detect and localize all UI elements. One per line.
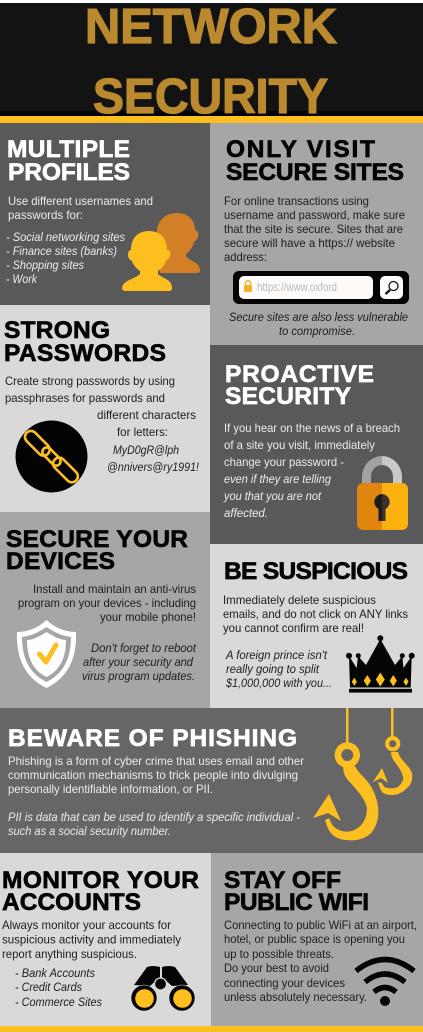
- text: devices body: your mobile phone!: [100, 610, 196, 624]
- text: phishing body: communication mechanisms to trick people into divulging: [8, 768, 298, 782]
- panel: be suspicious: [210, 544, 423, 709]
- note: PII definition: PII is data that can be used to identify a specific individual -: [8, 810, 300, 824]
- icon: browser address bar: [233, 271, 409, 304]
- text: secure sites body: that the site is secure. Sites that are: [224, 222, 403, 236]
- text: password examples: [107, 443, 200, 474]
- title: SECURITY: [93, 70, 328, 124]
- text: proactive caveat: affected.: [224, 506, 268, 520]
- heading: secure your devices: DEVICES: [6, 548, 115, 575]
- text: suspicious body: emails, and do not click on ANY links: [223, 607, 408, 621]
- list: site types: - Social networking sites: [6, 230, 125, 244]
- text: wifi body: hotel, or public space is opening you: [224, 932, 405, 946]
- heading: monitor your accounts: [2, 867, 199, 916]
- list: account types: - Commerce Sites: [15, 995, 102, 1009]
- text: suspicious body: you cannot confirm are real!: [223, 621, 364, 635]
- text: secure sites body: address:: [224, 250, 267, 264]
- panel: proactive security: [210, 345, 423, 544]
- note: reboot reminder: Don't forget to reboot: [91, 641, 197, 655]
- panel: only visit secure sites: [210, 123, 423, 345]
- text: wifi body: up to possible threats.: [224, 947, 334, 961]
- note: foreign prince: [225, 648, 332, 690]
- note: secure sites: Secure sites are also less vulnerable: [229, 310, 408, 324]
- text: passwords body: [5, 374, 196, 439]
- text: secure sites body: username and password, make sure: [224, 208, 405, 222]
- text: profiles intro: [8, 194, 153, 222]
- icon: fishing hooks: [313, 708, 412, 840]
- icon: browser address bar: https://www.oxford: [257, 280, 337, 294]
- text: devices body: [18, 582, 196, 624]
- text: devices body: program on your devices - including: [18, 596, 196, 610]
- text: proactive caveat: you that you are not: [223, 489, 322, 503]
- heading: only visit secure sites: [226, 136, 404, 186]
- panel: strong passwords: [0, 305, 210, 512]
- text: secure sites body: For online transactions using: [224, 194, 369, 208]
- text: wifi body: connecting your devices: [224, 976, 345, 990]
- text: profiles intro: passwords for:: [8, 208, 83, 222]
- heading: multiple profiles: [7, 136, 130, 186]
- icon: binoculars: [131, 966, 195, 1011]
- note: reboot reminder: virus program updates.: [82, 669, 195, 683]
- text: suspicious body: [223, 593, 408, 635]
- note: secure sites: [229, 310, 408, 338]
- icon: shield with check: [17, 620, 76, 688]
- list: site types: - Work: [6, 272, 38, 286]
- note: reboot reminder: after your security and: [83, 655, 193, 669]
- icon: crown: [346, 635, 415, 693]
- list: account types: - Bank Accounts: [15, 966, 95, 980]
- panel: multiple profiles: [0, 123, 210, 305]
- header banner: [0, 0, 423, 124]
- heading: secure your devices: [6, 526, 188, 575]
- note: foreign prince: really going to split: [226, 662, 320, 676]
- title: [85, 0, 337, 124]
- footer bar: [0, 1026, 423, 1032]
- list: site types: - Finance sites (banks): [6, 244, 117, 258]
- text: phishing body: Phishing is a form of cyber crime that uses email and other: [8, 754, 304, 768]
- heading: strong passwords: [4, 317, 166, 367]
- text: suspicious body: Immediately delete suspicious: [223, 593, 376, 607]
- heading: monitor your accounts: MONITOR YOUR: [2, 867, 199, 894]
- icon: two people: [122, 213, 200, 291]
- icon: wifi: [356, 960, 414, 1006]
- heading: only visit secure sites: ONLY VISIT: [226, 136, 375, 163]
- note: secure sites: to compromise.: [279, 324, 355, 338]
- note: foreign prince: A foreign prince isn't: [225, 648, 328, 662]
- note: PII definition: such as a social security number.: [8, 824, 171, 838]
- text: passwords body: different characters: [97, 408, 196, 422]
- text: proactive caveat: even if they are telling: [224, 472, 331, 486]
- list: site types: - Shopping sites: [6, 258, 84, 272]
- text: proactive body: of a site you visit, immediately: [224, 438, 375, 452]
- text: monitor body: report anything suspicious.: [2, 947, 137, 961]
- heading: proactive security: SECURITY: [225, 383, 351, 410]
- text: profiles intro: Use different usernames and: [8, 194, 153, 208]
- heading: proactive security: [225, 361, 374, 410]
- text: wifi body: Do your best to avoid: [224, 961, 329, 975]
- text: passwords body: Create strong passwords by using: [5, 374, 175, 388]
- heading: multiple profiles: PROFILES: [8, 159, 130, 186]
- text: passwords body: for letters:: [117, 425, 168, 439]
- heading: stay off public wifi: PUBLIC WIFI: [224, 889, 369, 916]
- heading: only visit secure sites: SECURE SITES: [226, 159, 404, 186]
- heading: multiple profiles: MULTIPLE: [7, 136, 130, 163]
- heading: strong passwords: PASSWORDS: [4, 340, 166, 367]
- text: passwords body: passphrases for passwords and: [5, 391, 165, 405]
- text: proactive caveat: [223, 472, 331, 520]
- note: PII definition: [8, 810, 300, 838]
- list: account types: - Credit Cards: [15, 980, 82, 994]
- panel: beware of phishing: [0, 708, 423, 853]
- panel: stay off public wifi: [211, 853, 423, 1026]
- heading: monitor your accounts: ACCOUNTS: [2, 889, 141, 916]
- panel: monitor your accounts: [0, 853, 211, 1026]
- list: account types: [15, 966, 102, 1009]
- heading: secure your devices: SECURE YOUR: [6, 526, 188, 553]
- heading: beware of phishing: BEWARE OF PHISHING: [8, 725, 297, 752]
- heading: stay off public wifi: STAY OFF: [224, 867, 341, 894]
- text: monitor body: Always monitor your accounts for: [2, 918, 171, 932]
- heading: strong passwords: STRONG: [4, 317, 110, 344]
- text: proactive body: If you hear on the news of a breach: [224, 421, 400, 435]
- heading: proactive security: PROACTIVE: [225, 361, 374, 388]
- text: phishing body: [8, 754, 304, 796]
- text: password examples: MyD0gR@lph: [113, 443, 179, 457]
- text: secure sites body: [224, 194, 405, 264]
- heading: stay off public wifi: [224, 867, 369, 916]
- note: foreign prince: $1,000,000 with you...: [225, 676, 332, 690]
- heading: be suspicious: BE SUSPICIOUS: [224, 558, 408, 585]
- text: wifi body: [224, 918, 417, 1004]
- panel: secure your devices: [0, 512, 210, 709]
- icon: chain link: [16, 420, 88, 492]
- text: monitor body: [2, 918, 181, 961]
- text: proactive body: change your password -: [224, 455, 344, 469]
- text: devices body: Install and maintain an anti-virus: [33, 582, 196, 596]
- text: wifi body: unless absolutely necessary.: [224, 990, 367, 1004]
- list: site types: [6, 230, 125, 286]
- icon: padlock: [357, 456, 408, 530]
- text: monitor body: suspicious activity and immediately: [2, 932, 181, 946]
- text: password examples: @nnivers@ry1991!: [107, 460, 200, 474]
- title: NETWORK: [85, 0, 337, 54]
- text: proactive body: [224, 421, 400, 469]
- text: secure sites body: secure will have a https:// website: [224, 236, 395, 250]
- text: phishing body: personally identifiable information, or PII.: [8, 782, 213, 796]
- note: reboot reminder: [82, 641, 197, 683]
